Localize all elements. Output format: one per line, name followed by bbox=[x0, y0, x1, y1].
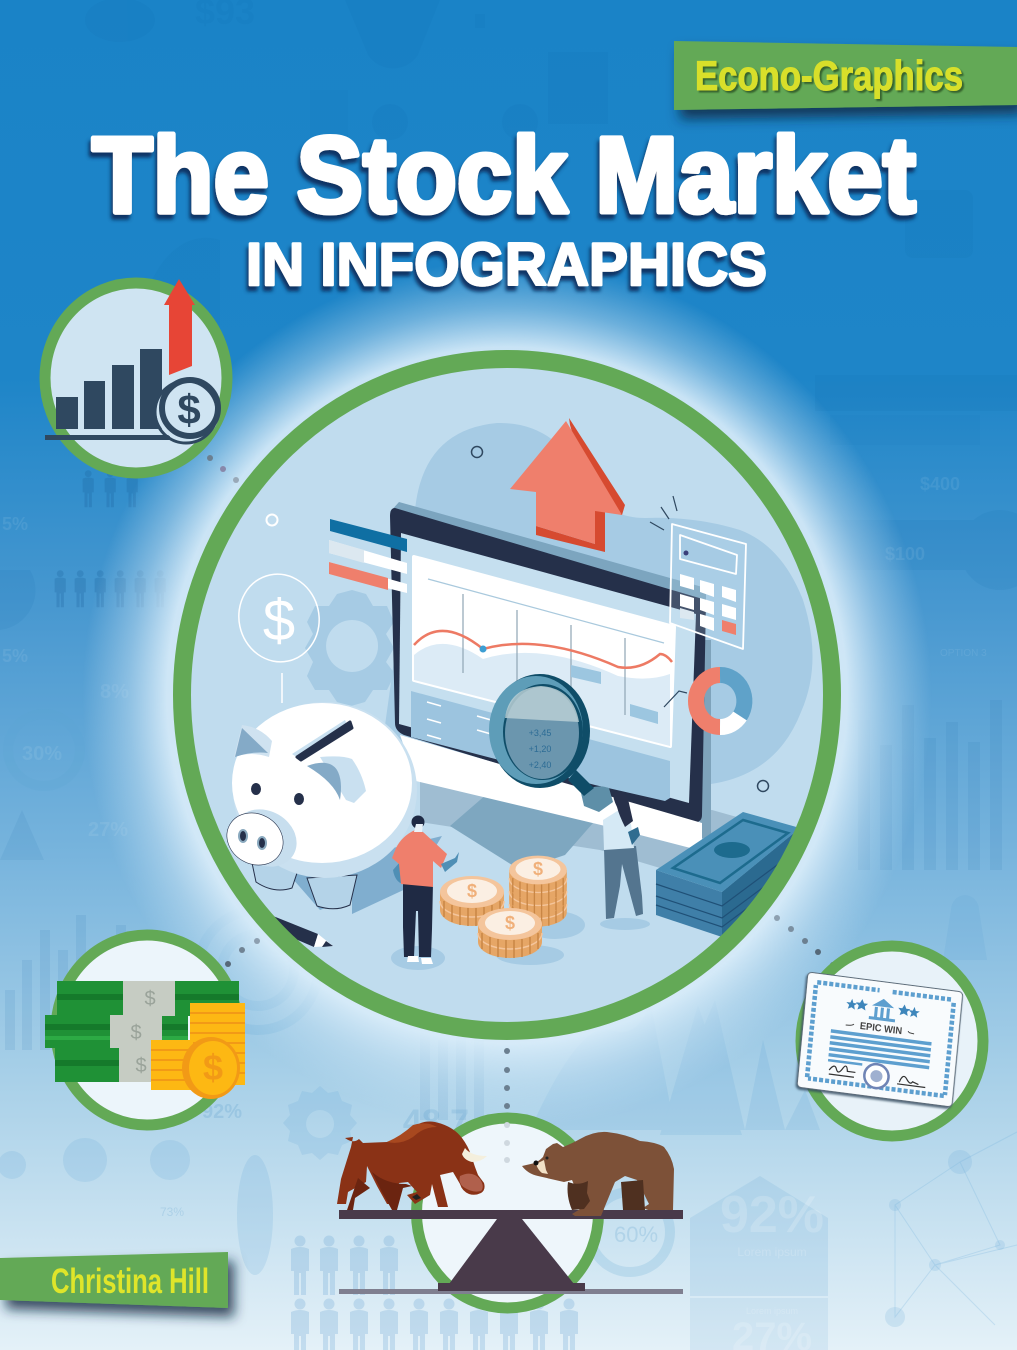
background blob bbox=[385, 423, 812, 784]
side label bars bbox=[329, 519, 407, 593]
icon: gold coins bbox=[151, 1003, 245, 1099]
faint background infographic pattern: 5% bbox=[2, 646, 28, 666]
author banner bbox=[0, 1252, 228, 1308]
certificate document bbox=[797, 972, 963, 1107]
icon: green banknote stacks: $ bbox=[130, 1022, 142, 1044]
faint background infographic pattern: Lorem ipsum bbox=[746, 1306, 798, 1316]
illustration scene bbox=[217, 418, 813, 970]
gear bbox=[305, 590, 395, 706]
faint background infographic pattern: 27% bbox=[88, 819, 128, 841]
faint background infographic pattern: $100 bbox=[885, 544, 925, 564]
series name: Econo-Graphics bbox=[695, 52, 963, 99]
coin stacks: $ bbox=[533, 859, 543, 879]
dollar bubble: $ bbox=[263, 588, 295, 653]
icon circle: cash and coins bbox=[45, 935, 245, 1125]
faint background infographic pattern: 92% bbox=[720, 1186, 824, 1244]
certificate document: EPIC WIN bbox=[859, 1021, 903, 1037]
icon: green banknote stacks: $ bbox=[135, 1055, 147, 1077]
chart value tags bbox=[571, 665, 658, 724]
author name: Christina Hill bbox=[51, 1262, 209, 1301]
pen bbox=[274, 916, 333, 947]
faint background infographic pattern: 48.7 bbox=[403, 1103, 469, 1141]
balance beam and base bbox=[339, 1210, 683, 1294]
series banner bbox=[674, 41, 1017, 110]
coin stacks bbox=[440, 856, 585, 965]
faint background infographic pattern: 5% bbox=[2, 514, 28, 534]
main circle ring bbox=[182, 359, 832, 1031]
trend marker bbox=[480, 646, 486, 652]
red trend line bbox=[414, 631, 672, 668]
icon: bars bbox=[45, 349, 170, 440]
faint background infographic pattern: 92% bbox=[202, 1101, 242, 1123]
icon: red arrow bbox=[164, 279, 195, 375]
icon: green banknote stacks: $ bbox=[144, 988, 156, 1010]
magnifying glass: +2,40 bbox=[529, 760, 551, 770]
icon: dollar coin bbox=[155, 378, 220, 443]
faint background infographic pattern: 30% bbox=[22, 743, 62, 765]
icon circle: bull and bear on balance bbox=[337, 1118, 683, 1308]
magnifying glass: +1,20 bbox=[529, 744, 551, 754]
donut chart bbox=[664, 675, 744, 727]
piggy bank bbox=[217, 702, 442, 914]
calculator bbox=[650, 496, 746, 649]
faint background infographic pattern: 60% bbox=[614, 1222, 658, 1247]
soft glow behind main circle bbox=[82, 260, 932, 1130]
woman figure bbox=[581, 786, 650, 930]
small decorative rings bbox=[266, 446, 768, 792]
icon circle: certificate bbox=[797, 946, 983, 1136]
icon: gold coins: $ bbox=[203, 1047, 223, 1088]
faint background infographic pattern: 73% bbox=[160, 1205, 184, 1219]
dollar bubble bbox=[238, 573, 320, 703]
faint background infographic pattern: $400 bbox=[920, 474, 960, 494]
coin stacks: $ bbox=[467, 881, 477, 901]
floor shadow and stand bbox=[420, 640, 736, 868]
monitor bbox=[390, 502, 706, 851]
dots inside circle bbox=[504, 1122, 510, 1163]
chart panel bbox=[414, 557, 674, 746]
bear bbox=[522, 1132, 674, 1216]
banknote stack bbox=[656, 812, 800, 937]
man figure bbox=[391, 816, 459, 970]
icon: dollar coin: $ bbox=[177, 386, 201, 433]
icon: green banknote stacks bbox=[45, 981, 239, 1082]
chart grid bbox=[428, 579, 664, 715]
faint background infographic pattern: OPTION 3 bbox=[940, 648, 987, 659]
lower table panel bbox=[411, 691, 670, 801]
chart area under curve bbox=[414, 644, 670, 746]
red up arrow bbox=[510, 418, 625, 552]
faint background infographic pattern: 8% bbox=[100, 681, 129, 703]
magnifying glass bbox=[489, 674, 594, 796]
icon circle: rising chart with dollar coin bbox=[45, 279, 227, 473]
magnifying glass: +3,45 bbox=[529, 728, 551, 738]
faint background infographic pattern: Lorem ipsum bbox=[737, 1245, 807, 1259]
bull bbox=[337, 1122, 487, 1210]
subtitle: IN INFOGRAPHICS bbox=[246, 231, 767, 298]
connector dots bbox=[207, 455, 836, 1128]
main illustration circle bbox=[182, 359, 832, 1031]
title: The Stock Market bbox=[92, 114, 916, 235]
coin stacks: $ bbox=[505, 913, 515, 933]
